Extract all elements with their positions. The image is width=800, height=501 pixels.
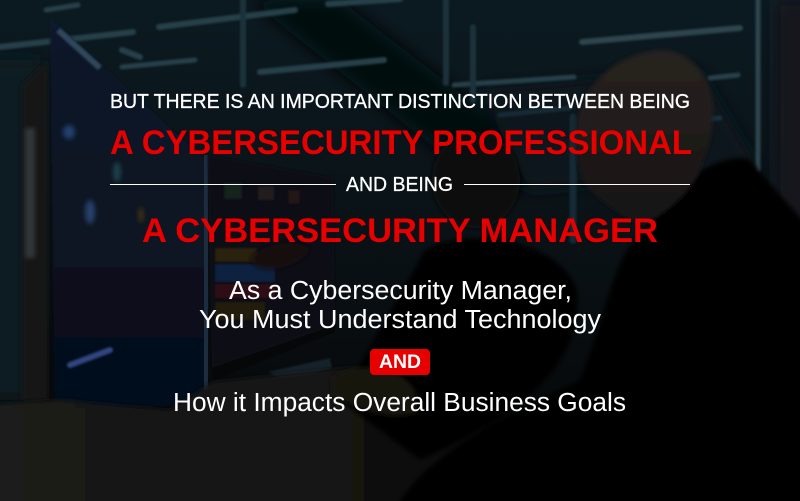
body text: business goals: How it Impacts Overall Business Goals (173, 389, 626, 417)
ceiling lights (0, 0, 758, 240)
ceiling structure (0, 0, 800, 400)
left wall panel (22, 60, 48, 400)
middle man (250, 132, 578, 460)
red AND badge: AND (379, 352, 421, 373)
body text: manager must understand technology: As a Cybersecurity Manager, (229, 277, 572, 305)
heading: cybersecurity manager: A CYBERSECURITY MANAGER (142, 212, 658, 250)
right man (390, 50, 800, 501)
divider with "and being": AND BEING (346, 174, 453, 196)
left large monitor (50, 18, 205, 410)
heading: cybersecurity professional: A CYBERSECURITY PROFESSIONAL (110, 124, 692, 162)
heading line 1: BUT THERE IS AN IMPORTANT DISTINCTION BETWEEN BEING (110, 91, 690, 113)
second monitor with dashboard (204, 155, 335, 390)
body text: manager must understand technology (199, 277, 601, 334)
desk (0, 362, 500, 501)
body text: manager must understand technology: You Must Understand Technology (199, 306, 601, 334)
red AND badge (370, 349, 430, 375)
